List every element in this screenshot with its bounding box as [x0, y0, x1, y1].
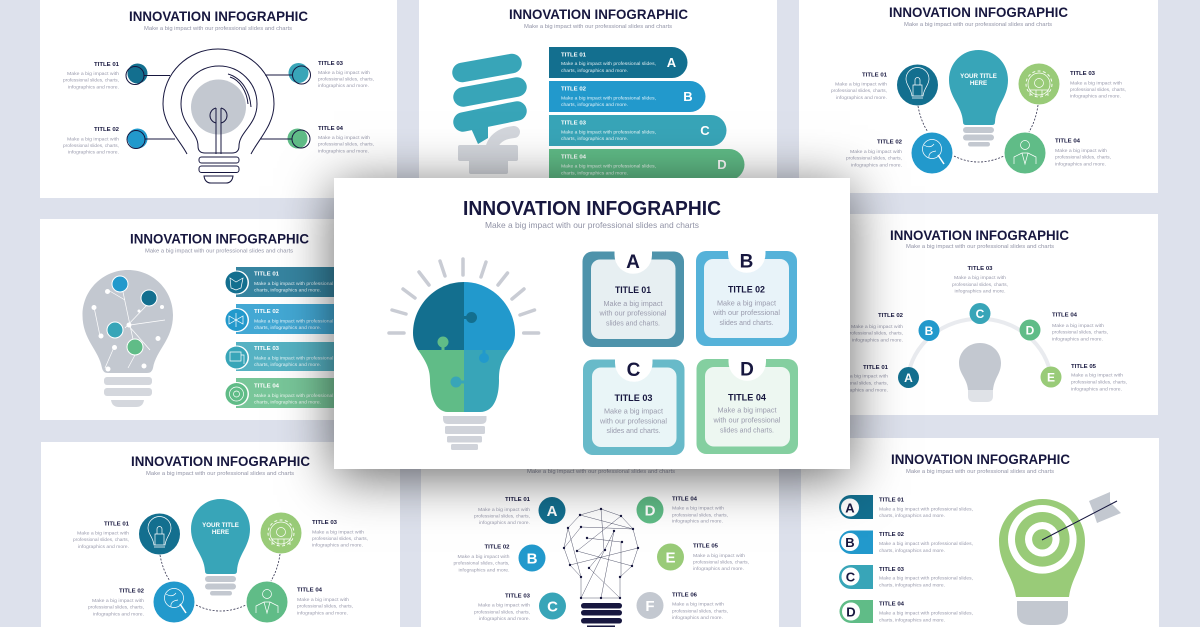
card D: D — [740, 360, 754, 380]
icon circle 03 — [1018, 64, 1060, 104]
dashed connectors — [160, 554, 280, 611]
bar 04: charts, infographics and more. — [254, 400, 321, 404]
icon circle 03 — [260, 512, 302, 554]
icon: outline light bulb — [163, 49, 274, 183]
text block 01: TITLE 01 — [104, 522, 129, 528]
text block 01: Make a big impact with — [836, 374, 889, 378]
text block 04: TITLE 04 — [318, 126, 344, 132]
icon: target bulb with arrow — [999, 492, 1121, 625]
text block 04: professional slides, charts, — [1052, 330, 1108, 334]
bar 04: Make a big impact with professional slides, — [254, 393, 349, 398]
arc — [908, 319, 1051, 377]
bar B — [549, 81, 706, 112]
text block 01 — [831, 72, 888, 100]
text block 02 — [846, 140, 903, 168]
text block 03: Make a big impact with — [318, 70, 371, 75]
icon circle 01 — [139, 514, 180, 554]
bar 02: charts, infographics and more. — [254, 325, 321, 330]
text block 04: professional slides, charts, — [318, 142, 374, 146]
text block 03: professional slides, charts, — [952, 282, 1008, 287]
bar D: Make a big impact with professional slides, — [561, 164, 656, 168]
slide: your title bulb, bottom left — [41, 442, 400, 627]
text block 03: professional slides, charts, — [318, 76, 374, 82]
text block 01: infographics and more. — [836, 95, 887, 100]
bar 02: Make a big impact with professional slides, — [254, 318, 349, 324]
node B: B — [925, 324, 934, 338]
central bulb: HERE — [970, 80, 987, 87]
card D: Make a big impact — [718, 408, 777, 414]
icon: spiral bulb — [458, 64, 518, 174]
node A: A — [904, 371, 913, 385]
bar 03: TITLE 03 — [254, 346, 279, 352]
text block 03 — [1070, 71, 1126, 98]
icon circle 04 — [246, 582, 288, 622]
text block 02 — [454, 544, 510, 572]
central bulb: YOUR TITLE — [960, 73, 997, 80]
icon: wireframe bulb — [563, 508, 639, 627]
text block 03: professional slides, charts, — [312, 536, 368, 541]
text block 04: infographics and more. — [1052, 336, 1103, 342]
text block 03 — [474, 594, 531, 621]
text block 05: infographics and more. — [1071, 386, 1122, 392]
text block 04: Make a big impact with — [318, 135, 371, 140]
card D: with our professional — [712, 418, 781, 424]
icon: light rays — [389, 259, 539, 333]
text block 04: infographics and more. — [297, 610, 348, 616]
text block 05 — [1071, 364, 1127, 392]
node A — [898, 367, 919, 388]
text block 01: infographics and more. — [68, 84, 119, 90]
icon circle 02 — [912, 132, 952, 174]
text block 02: TITLE 02 — [877, 140, 902, 146]
text block 03: professional slides, charts, — [474, 610, 530, 614]
text block 04 — [879, 602, 973, 622]
node A — [538, 497, 566, 524]
node E — [657, 544, 684, 570]
card C — [583, 358, 684, 455]
node C: C — [976, 307, 985, 321]
central bulb: HERE — [212, 529, 229, 536]
slide title: INNOVATION INFOGRAPHIC — [890, 227, 1069, 243]
node D — [636, 496, 664, 524]
panel: center slide — [334, 178, 850, 469]
bar D: charts, infographics and more. — [561, 170, 628, 176]
text block 04: charts, infographics and more. — [879, 618, 945, 622]
bar 01: charts, infographics and more. — [254, 288, 321, 292]
text block 03: Make a big impact with — [954, 275, 1007, 280]
bar A: A — [667, 55, 677, 70]
text block 04: TITLE 04 — [672, 496, 698, 502]
slide subtitle: Make a big impact with our professional slides and charts — [904, 22, 1052, 28]
text block 01: Make a big impact with — [67, 71, 120, 76]
slide subtitle: Make a big impact with our professional slides and charts — [527, 469, 675, 475]
text block 05: TITLE 05 — [693, 544, 718, 550]
bar 02: TITLE 02 — [254, 309, 279, 315]
bar C: TITLE 03 — [561, 120, 586, 126]
text block 02: Make a big impact with — [850, 149, 903, 154]
text block 04 — [672, 496, 728, 524]
card A: TITLE 01 — [615, 285, 651, 295]
text block 04: professional slides, charts, — [672, 512, 728, 518]
node E: E — [665, 550, 676, 566]
text block 02: infographics and more. — [851, 162, 902, 168]
text block 01: Make a big impact with professional slides, — [879, 506, 973, 512]
card C: with our professional — [599, 418, 667, 426]
text block 02: Make a big impact with — [92, 598, 145, 603]
main subtitle: Make a big impact with our professional slides and charts — [485, 220, 699, 230]
text block 04: TITLE 04 — [297, 588, 323, 594]
text block 02: TITLE 02 — [94, 127, 119, 133]
card B: Make a big impact — [717, 300, 776, 308]
text block 04: Make a big impact with professional slides, — [879, 610, 973, 616]
card C: C — [627, 360, 641, 381]
slide title: INNOVATION INFOGRAPHIC — [130, 230, 309, 246]
text block 01: Make a big impact with — [77, 530, 130, 536]
text block 01 — [474, 497, 531, 525]
text block 02: infographics and more. — [852, 338, 903, 342]
text block 03: TITLE 03 — [505, 594, 530, 600]
text block 04: Make a big impact with — [1055, 148, 1108, 153]
text block 02: professional slides, charts, — [847, 330, 903, 336]
slide title: INNOVATION INFOGRAPHIC — [509, 6, 688, 22]
text block 05: professional slides, charts, — [693, 560, 749, 564]
text block 04: Make a big impact with — [297, 597, 350, 602]
bar C: C — [700, 123, 710, 138]
text block 06: infographics and more. — [672, 615, 723, 620]
card C: TITLE 03 — [614, 393, 652, 403]
node C — [970, 303, 990, 324]
slide: wireframe bulb — [421, 450, 779, 627]
text block 05: professional slides, charts, — [1071, 380, 1127, 384]
icon: puzzle bulb — [413, 282, 515, 450]
bar B: TITLE 02 — [561, 86, 586, 92]
text block 04: infographics and more. — [672, 518, 723, 524]
bar A — [549, 47, 687, 78]
text block 04: TITLE 04 — [879, 602, 905, 608]
text block 03: Make a big impact with — [478, 602, 531, 608]
text block 04: infographics and more. — [1055, 162, 1106, 166]
text block 03 — [952, 266, 1008, 294]
slide subtitle: Make a big impact with our professional slides and charts — [144, 26, 292, 32]
bar 01: TITLE 01 — [254, 272, 279, 278]
text block 04 — [297, 588, 353, 616]
node 01 — [126, 64, 170, 84]
text block 01: TITLE 01 — [505, 497, 530, 503]
text block 04: infographics and more. — [318, 148, 369, 154]
bar A: TITLE 01 — [561, 52, 586, 58]
text block 03: infographics and more. — [318, 83, 369, 88]
text block 05: TITLE 05 — [1071, 364, 1096, 370]
bar D — [549, 149, 744, 180]
text block 04: Make a big impact with — [672, 506, 725, 510]
text block 03: Make a big impact with — [1070, 80, 1123, 86]
text block 04: TITLE 04 — [1055, 138, 1081, 144]
text block 01: professional slides, charts, — [831, 88, 887, 93]
card D: slides and charts. — [720, 428, 774, 434]
slide: outline bulb — [40, 0, 397, 198]
text block 02: TITLE 02 — [119, 588, 144, 594]
slide subtitle: Make a big impact with our professional slides and charts — [146, 471, 294, 477]
card D — [696, 358, 798, 454]
text block 02: Make a big impact with professional slides, — [879, 541, 973, 546]
bar B: Make a big impact with professional slides, — [561, 96, 656, 100]
bar C — [549, 115, 726, 146]
bar 01: Make a big impact with professional slides, — [254, 281, 349, 286]
text block 03: infographics and more. — [954, 288, 1006, 294]
text block 03: infographics and more. — [479, 616, 530, 621]
card A: Make a big impact — [604, 301, 663, 308]
node D — [1020, 320, 1040, 340]
bar 04: TITLE 04 — [254, 384, 280, 390]
text block 06: TITLE 06 — [672, 592, 697, 598]
text block 06: Make a big impact with — [672, 602, 725, 606]
text block 02: professional slides, charts, — [846, 156, 902, 160]
tab C — [839, 565, 873, 589]
node 04 — [260, 128, 310, 148]
slide subtitle: Make a big impact with our professional slides and charts — [906, 469, 1054, 475]
text block 03: infographics and more. — [312, 542, 363, 548]
text block 02: professional slides, charts, — [88, 604, 144, 610]
text block 03: Make a big impact with — [312, 530, 365, 534]
node C: C — [547, 598, 558, 616]
text block 04: professional slides, charts, — [297, 604, 353, 608]
slide: arc timeline — [830, 214, 1158, 415]
bar C: charts, infographics and more. — [561, 136, 628, 141]
card A: slides and charts. — [606, 320, 660, 328]
text block 02: professional slides, charts, — [63, 143, 119, 148]
bar 03: Make a big impact with professional slides, — [254, 356, 349, 360]
node B: B — [527, 550, 538, 568]
node 03 — [265, 63, 310, 84]
slide subtitle: Make a big impact with our professional slides and charts — [906, 244, 1054, 250]
slide subtitle: Make a big impact with our professional slides and charts — [524, 24, 672, 30]
text block 03: TITLE 03 — [968, 266, 992, 272]
node B — [518, 544, 546, 572]
central bulb — [191, 499, 250, 596]
text block 03: TITLE 03 — [312, 520, 337, 526]
text block 02 — [63, 127, 120, 154]
card B: slides and charts. — [720, 320, 774, 327]
text block 03 — [312, 520, 368, 548]
main title: INNOVATION INFOGRAPHIC — [463, 198, 721, 220]
slide subtitle: Make a big impact with our professional slides and charts — [145, 248, 293, 254]
text block 03: infographics and more. — [1070, 94, 1121, 98]
text block 02: TITLE 02 — [878, 313, 903, 319]
text block 01: TITLE 01 — [862, 72, 887, 78]
text block 02: TITLE 02 — [879, 532, 904, 538]
text block 04: TITLE 04 — [1052, 312, 1078, 318]
card B: with our professional — [712, 310, 780, 317]
bar D: TITLE 04 — [561, 154, 587, 160]
tab B: B — [845, 535, 855, 550]
text block 03: TITLE 03 — [879, 567, 904, 573]
slide: network bulb with bars — [40, 219, 350, 420]
text block 01: Make a big impact with — [835, 82, 888, 86]
node D: D — [645, 502, 656, 520]
text block 01: professional slides, charts, — [832, 380, 888, 386]
text block 03: professional slides, charts, — [1070, 87, 1126, 92]
text block 02: infographics and more. — [68, 150, 119, 154]
text block 01: infographics and more. — [837, 388, 888, 392]
text block 04 — [318, 126, 374, 154]
tab D: D — [846, 604, 856, 620]
bar D: D — [717, 157, 727, 172]
slide title: INNOVATION INFOGRAPHIC — [131, 453, 310, 469]
text block 01: TITLE 01 — [879, 498, 904, 504]
bar A: Make a big impact with professional slides, — [561, 61, 656, 66]
text block 02: Make a big impact with — [851, 324, 904, 329]
text block 04: professional slides, charts, — [1055, 154, 1111, 160]
text block 01 — [63, 62, 120, 90]
bar B: charts, infographics and more. — [561, 102, 628, 107]
node E — [1040, 366, 1062, 388]
bar C: Make a big impact with professional slides, — [561, 130, 656, 134]
text block 01: professional slides, charts, — [474, 514, 530, 518]
slide title: INNOVATION INFOGRAPHIC — [129, 8, 308, 24]
text block 05: infographics and more. — [693, 566, 744, 571]
icon: grey bulb — [959, 343, 1001, 402]
card A: A — [626, 252, 640, 273]
text block 01: charts, infographics and more. — [879, 513, 945, 518]
node D: D — [1026, 324, 1035, 338]
icon circle 04 — [1004, 132, 1046, 174]
icon circle 02 — [154, 582, 194, 622]
central bulb: YOUR TITLE — [202, 522, 239, 529]
text block 02: Make a big impact with — [458, 554, 510, 559]
text block 01: Make a big impact with — [478, 507, 531, 512]
node 02 — [127, 128, 175, 148]
bar 04 — [225, 378, 350, 408]
text block 02 — [88, 588, 145, 616]
card D: TITLE 04 — [728, 392, 766, 402]
text block 02 — [879, 532, 973, 553]
node A: A — [547, 503, 558, 520]
text block 03 — [879, 567, 973, 588]
tab C: C — [846, 570, 856, 584]
bar 01 — [225, 267, 350, 297]
text block 06: professional slides, charts, — [672, 608, 728, 614]
node F: F — [645, 598, 655, 615]
text block 01: infographics and more. — [479, 520, 530, 525]
text block 04: Make a big impact with — [1052, 323, 1105, 328]
bar B: B — [683, 89, 693, 104]
node F — [636, 592, 664, 619]
text block 01 — [879, 498, 973, 518]
tab D — [840, 600, 873, 623]
text block 02: TITLE 02 — [484, 544, 510, 550]
text block 01: professional slides, charts, — [73, 537, 129, 542]
text block 01: professional slides, charts, — [63, 78, 119, 82]
text block 02: professional slides, charts, — [454, 560, 510, 566]
slide: spiral bulb with bars — [419, 0, 777, 185]
text block 05 — [693, 544, 749, 571]
text block 01 — [832, 365, 889, 392]
text block 05: Make a big impact with — [693, 553, 746, 558]
node E: E — [1047, 370, 1055, 384]
text block 01: TITLE 01 — [94, 62, 119, 68]
slide title: INNOVATION INFOGRAPHIC — [891, 451, 1070, 467]
text block 02: charts, infographics and more. — [879, 548, 945, 553]
card B: TITLE 02 — [728, 284, 765, 294]
card B — [696, 250, 797, 346]
slide: your title bulb, top right — [799, 0, 1158, 193]
dashed connectors — [918, 105, 1038, 162]
icon circle 01 — [897, 64, 938, 106]
node B — [918, 320, 940, 341]
text block 05: Make a big impact with — [1071, 372, 1124, 378]
tab A — [839, 495, 873, 519]
text block 02: infographics and more. — [458, 568, 510, 572]
text block 01 — [73, 522, 130, 549]
bar 02 — [225, 304, 350, 334]
bar 03: charts, infographics and more. — [254, 362, 321, 367]
slide title: INNOVATION INFOGRAPHIC — [889, 4, 1068, 20]
text block 03: TITLE 03 — [318, 61, 343, 67]
text block 06 — [672, 592, 728, 620]
node C — [539, 592, 566, 620]
text block 01: TITLE 01 — [863, 365, 888, 371]
card B: B — [740, 252, 753, 272]
text block 03: charts, infographics and more. — [879, 582, 945, 588]
text block 01: infographics and more. — [78, 544, 129, 549]
text block 04 — [1052, 312, 1108, 342]
card A — [582, 250, 684, 347]
text block 02: infographics and more. — [93, 612, 144, 616]
tab A: A — [845, 500, 855, 516]
bar 03 — [225, 342, 350, 371]
slide: target bulb — [801, 438, 1159, 627]
bar A: charts, infographics and more. — [561, 68, 628, 73]
icon: network bulb — [82, 270, 173, 407]
card A: with our professional — [598, 310, 667, 318]
tab B — [839, 530, 873, 554]
text block 02: Make a big impact with — [67, 136, 120, 142]
text block 03: Make a big impact with professional slides, — [879, 576, 973, 580]
text block 03: TITLE 03 — [1070, 71, 1095, 77]
text block 02 — [847, 313, 904, 342]
card C: Make a big impact — [604, 408, 663, 416]
text block 03 — [318, 61, 374, 88]
card C: slides and charts. — [606, 428, 661, 435]
text block 04 — [1055, 138, 1111, 166]
central bulb — [949, 50, 1008, 146]
